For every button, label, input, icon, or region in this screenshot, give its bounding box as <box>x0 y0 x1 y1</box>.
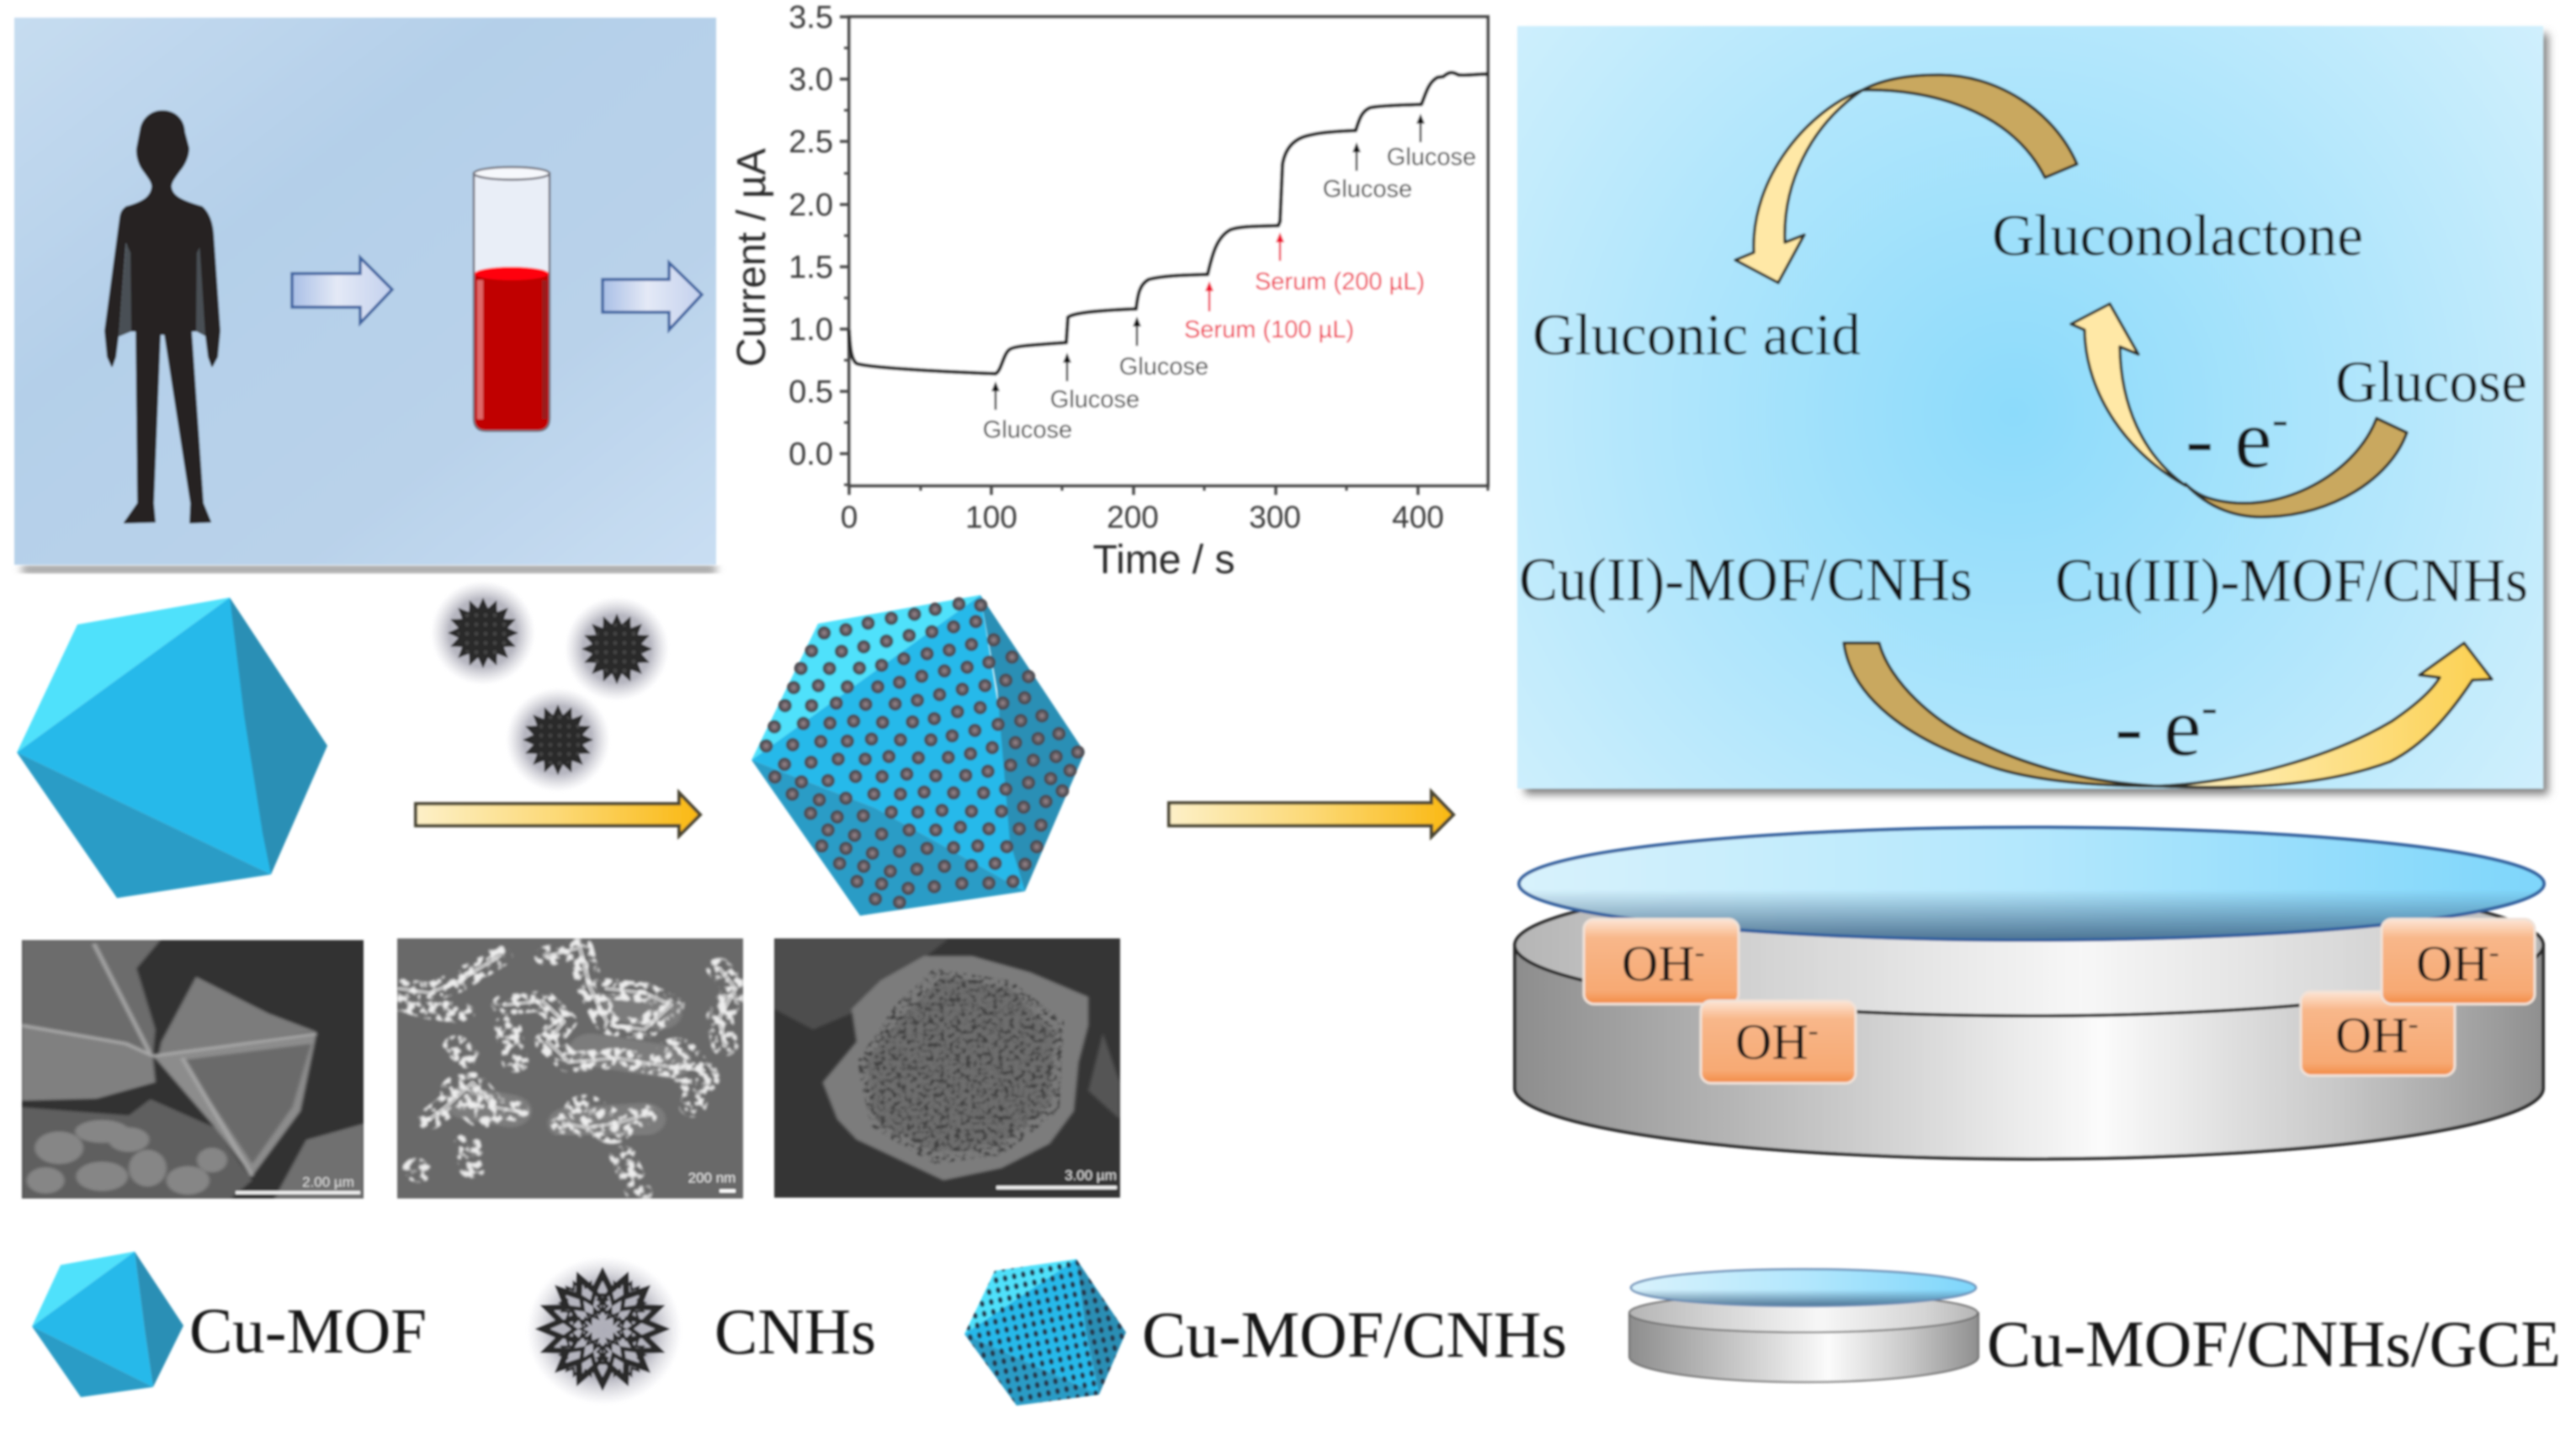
panel: blood sampling <box>14 18 716 573</box>
OH- box, lower right <box>2301 991 2455 1076</box>
chart: y axis title: Current / µA <box>730 148 774 367</box>
chart: y tick labels: 0.0 <box>789 437 833 472</box>
image: SEM of Cu-MOF/CNHs <box>774 938 1120 1198</box>
chart: y tick labels: 1.0 <box>789 312 833 348</box>
legend text: Cu-MOF/CNHs/GCE: Cu-MOF/CNHs/GCE <box>1987 1307 2561 1380</box>
legend text: CNHs: CNHs <box>714 1295 876 1368</box>
image: SEM of CNHs <box>397 938 743 1198</box>
chart: x tick labels: 400 <box>1392 500 1444 534</box>
arrow: Cu(II) to Cu(III) <box>1844 643 2492 787</box>
text: minus electron, upper: - e <box>2186 392 2272 486</box>
OH- box, lower left: - <box>1809 1013 1819 1047</box>
legend text: Cu-MOF/CNHs: Cu-MOF/CNHs <box>1142 1298 1567 1371</box>
legend: Cu-MOF <box>32 1252 427 1397</box>
chart: y tick labels: 2.0 <box>789 188 833 223</box>
arrow: person to sample <box>292 258 392 323</box>
OH- box, lower right: OH <box>2335 1007 2409 1063</box>
OH- box, upper left: - <box>1695 935 1705 969</box>
MOF film disc <box>1519 827 2544 940</box>
chart: glucose additions: Glucose <box>1323 176 1412 203</box>
chart: glucose additions: Glucose <box>983 417 1072 444</box>
text: Gluconic acid: Gluconic acid <box>1532 303 1861 368</box>
OH- box, upper right: - <box>2489 935 2499 969</box>
OH- box, upper right: OH <box>2416 936 2489 991</box>
chart: y tick labels: 2.5 <box>789 125 833 160</box>
chart: x tick labels: 200 <box>1107 500 1159 534</box>
text: Glucose: Glucose <box>2335 350 2527 415</box>
composite: CNH dots <box>759 598 1085 909</box>
image: SEM of CNHs: 200 nm <box>688 1170 736 1186</box>
arrow: glucose to gluconolactone <box>2071 304 2407 517</box>
chart: y tick labels <box>789 0 833 472</box>
chart: data curve <box>849 72 1488 374</box>
text: Gluconolactone: Gluconolactone <box>1992 204 2363 268</box>
chart: y tick labels: 0.5 <box>789 375 833 410</box>
chart: amperometric response <box>730 0 1488 582</box>
chart: glucose additions: Glucose <box>1050 386 1139 413</box>
legend text: Cu-MOF: Cu-MOF <box>189 1296 427 1367</box>
OH- box, lower right: - <box>2409 1007 2419 1040</box>
text: minus electron, upper: - <box>2272 391 2288 446</box>
chart: x axis title: Time / s <box>1093 538 1235 582</box>
icon: three CNH particles <box>431 581 669 792</box>
icon: Cu-MOF octahedron <box>17 598 327 898</box>
OH- box, lower left <box>1701 1001 1856 1083</box>
chart: y tick labels: 3.5 <box>789 0 833 35</box>
OH- box, upper left <box>1584 919 1739 1004</box>
text: minus electron, lower: - <box>2202 679 2217 734</box>
legend: CNHs <box>527 1257 876 1405</box>
OH- box, upper right <box>2382 919 2535 1004</box>
chart: serum additions <box>1184 232 1425 343</box>
OH- box, upper left: OH <box>1622 936 1695 991</box>
arrow: gluconolactone to gluconic acid <box>1735 75 2077 283</box>
image: SEM of Cu-MOF/CNHs: 3.00 µm <box>1065 1167 1117 1183</box>
text: minus electron, lower: - e <box>2115 680 2202 773</box>
chart: glucose additions <box>983 114 1476 444</box>
chart: x tick labels: 100 <box>965 500 1017 534</box>
chart: serum additions: Serum (100 µL) <box>1184 316 1354 343</box>
icon: electrode with MOF film <box>1515 827 2544 1159</box>
legend: Cu-MOF/CNHs <box>964 1259 1567 1406</box>
text: Cu(II)-MOF/CNHs: Cu(II)-MOF/CNHs <box>1519 545 1973 614</box>
chart: y tick labels: 3.0 <box>789 62 833 98</box>
electrode body <box>1515 945 2543 1159</box>
arrow: electrode modification step <box>1169 792 1453 837</box>
image: SEM of Cu-MOF <box>22 940 364 1198</box>
chart: serum additions: Serum (200 µL) <box>1255 268 1425 295</box>
chart: y tick labels: 1.5 <box>789 250 833 285</box>
OH- box, lower left: OH <box>1735 1014 1809 1070</box>
icon: human silhouette <box>105 111 220 523</box>
image: SEM of Cu-MOF: 2.00 µm <box>302 1174 354 1190</box>
chart: x tick labels <box>841 500 1444 534</box>
icon: Cu-MOF/CNHs composite <box>752 595 1085 916</box>
panel: reaction mechanism <box>1517 26 2548 795</box>
chart: glucose additions: Glucose <box>1119 353 1208 380</box>
text: Cu(III)-MOF/CNHs: Cu(III)-MOF/CNHs <box>2055 546 2528 614</box>
chart: x tick labels: 300 <box>1249 500 1301 534</box>
electrode top face <box>1515 874 2543 1016</box>
legend: Cu-MOF/CNHs/GCE <box>1629 1269 2561 1382</box>
arrow: sample to chart <box>603 263 702 330</box>
chart: x tick labels: 0 <box>841 500 858 534</box>
arrow: mixing step <box>416 793 700 836</box>
chart: glucose additions: Glucose <box>1387 144 1476 171</box>
icon: test tube with blood <box>474 167 550 431</box>
